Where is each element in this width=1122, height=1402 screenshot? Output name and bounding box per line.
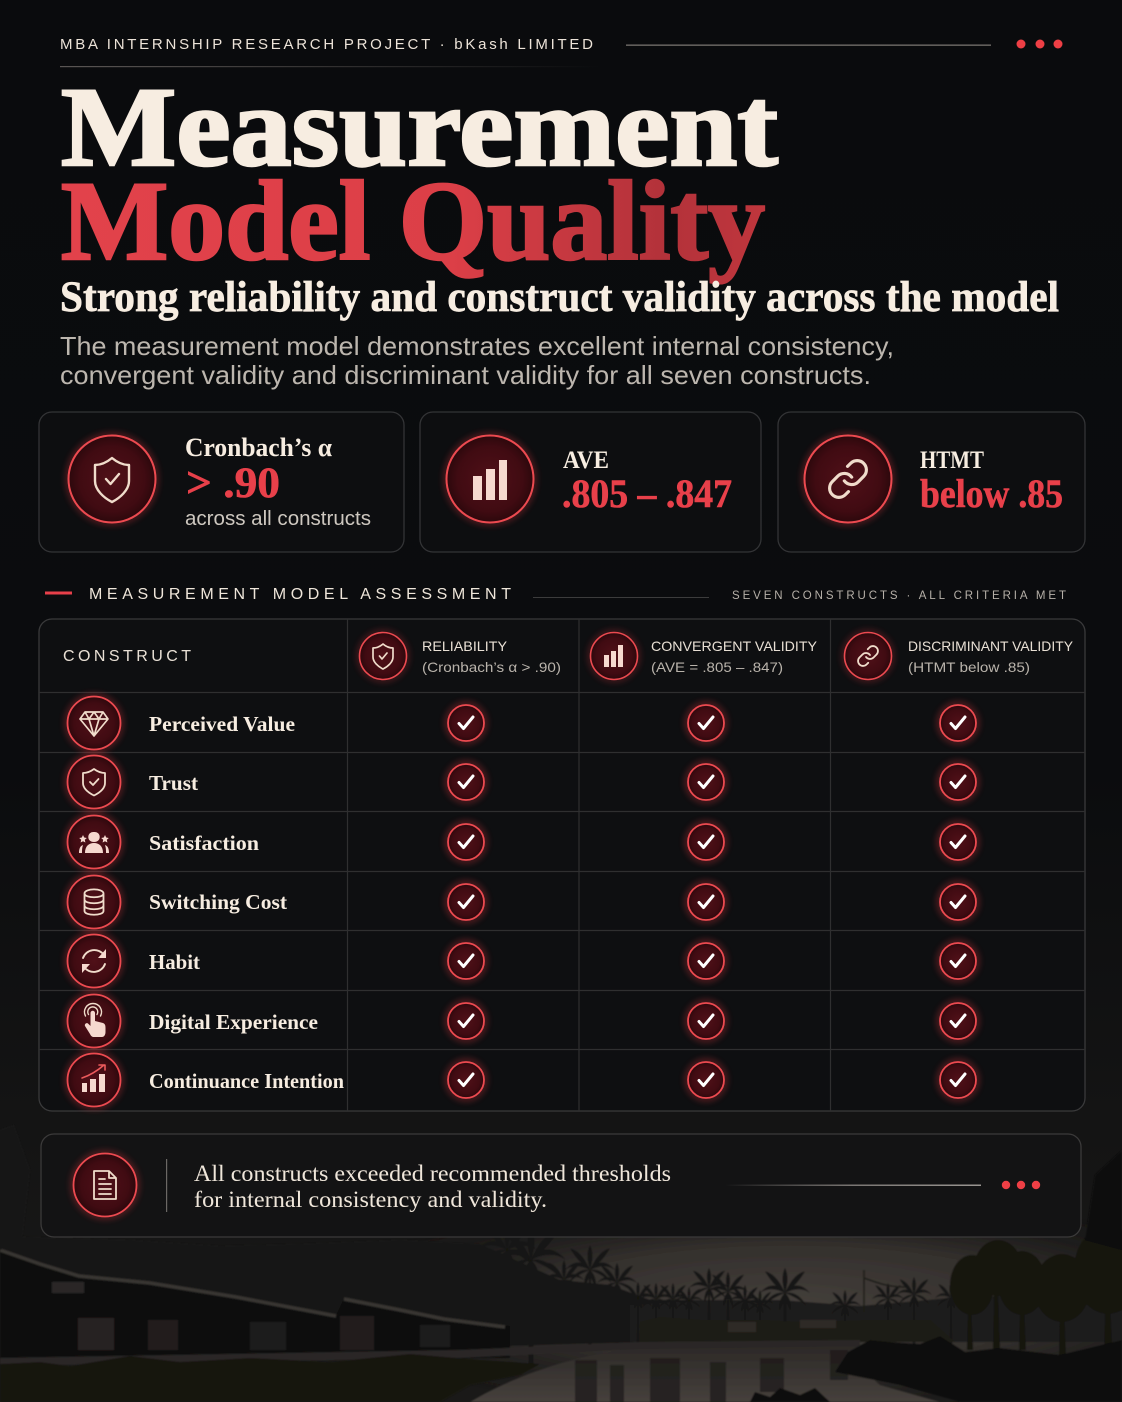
row: Habit: [67, 934, 977, 988]
text: AVE value: [562, 447, 732, 516]
text: HTMT value: [920, 447, 1063, 516]
riverside buildings: [0, 1252, 510, 1362]
icon: shield: [68, 435, 156, 523]
title: Measurement: [61, 65, 778, 190]
row: Satisfaction: Satisfaction: [149, 831, 259, 855]
text: AVE value: .805 – .847: [562, 471, 732, 516]
row: Switching Cost: Switching Cost: [149, 890, 287, 914]
foreground bushes: [0, 1354, 540, 1402]
header: reliability: (Cronbach’s α > .90): [422, 659, 561, 675]
icon: bars: [446, 435, 534, 523]
header: reliability: RELIABILITY: [422, 638, 508, 654]
text: AVE value: AVE: [563, 447, 609, 474]
title: [61, 65, 778, 284]
text: Cronbach's value: across all constructs: [185, 508, 371, 530]
icon: link: [804, 435, 892, 523]
row: Habit: Habit: [149, 950, 200, 974]
row: Trust: Trust: [149, 771, 198, 795]
header: convergent validity: [590, 632, 818, 680]
panel: HTMT: [778, 412, 1085, 552]
distant houses: [640, 1317, 955, 1342]
text: conclusion: [194, 1161, 671, 1212]
left tree mass: [0, 1236, 700, 1360]
icon: document: [73, 1153, 137, 1217]
text: conclusion: for internal consistency and validity.: [194, 1187, 547, 1212]
row: Digital Experience: Digital Experience: [149, 1010, 318, 1034]
eyebrow line: [60, 36, 1062, 67]
row: Trust: [67, 755, 977, 809]
header: discriminant validity: [844, 632, 1074, 680]
panel: Cronbach's alpha: [39, 412, 404, 552]
eyebrow line: MBA INTERNSHIP RESEARCH PROJECT · bKash LIMITED: [60, 36, 593, 53]
text: Cronbach's value: [185, 433, 371, 530]
description: The measurement model demonstrates excellent internal consistency,: [60, 331, 894, 361]
header: discriminant validity: DISCRIMINANT VALIDITY: [908, 638, 1074, 654]
row: Digital Experience: [67, 994, 977, 1048]
section heading: [45, 586, 1066, 603]
description: convergent validity and discriminant validity for all seven constructs.: [60, 360, 871, 390]
broadleaf trees on the right: [950, 1226, 1122, 1360]
header: convergent validity: CONVERGENT VALIDITY: [651, 638, 818, 654]
riverbank path: [0, 1340, 860, 1366]
hazy distant tree line: [630, 1296, 1122, 1342]
text: HTMT value: below .85: [920, 471, 1063, 516]
description: [60, 331, 894, 390]
callout: conclusion: [41, 1134, 1081, 1237]
palm trees: [477, 1220, 967, 1368]
row: Perceived Value: [67, 696, 977, 750]
title: Model Quality: [61, 159, 765, 284]
background scene: riverside town at dusk: [0, 1125, 1122, 1402]
utility pole: [864, 1270, 905, 1312]
row: Perceived Value: Perceived Value: [149, 712, 295, 736]
panel: AVE: [420, 412, 761, 552]
header: discriminant validity: (HTMT below .85): [908, 659, 1030, 675]
subtitle: Strong reliability and construct validity across the model: [60, 274, 1059, 321]
section heading: MEASUREMENT MODEL ASSESSMENT: [89, 586, 511, 603]
text: HTMT value: HTMT: [920, 447, 984, 474]
table: measurement model assessment: [39, 619, 1085, 1111]
row: Satisfaction: [67, 815, 977, 869]
header: reliability: [359, 632, 561, 680]
section heading: SEVEN CONSTRUCTS · ALL CRITERIA MET: [732, 590, 1066, 602]
river: [470, 1346, 940, 1402]
text: conclusion: All constructs exceeded recommended thresholds: [194, 1161, 671, 1186]
text: Cronbach's value: Cronbach’s α: [185, 433, 332, 462]
header: convergent validity: (AVE = .805 – .847): [651, 659, 783, 675]
header: construct: CONSTRUCT: [63, 648, 191, 665]
row: Continuance Intention: Continuance Intention: [149, 1069, 344, 1093]
row: Continuance Intention: [67, 1053, 977, 1107]
side foliage: [0, 1125, 30, 1250]
row: Switching Cost: [67, 875, 977, 929]
text: Cronbach's value: > .90: [186, 460, 280, 507]
